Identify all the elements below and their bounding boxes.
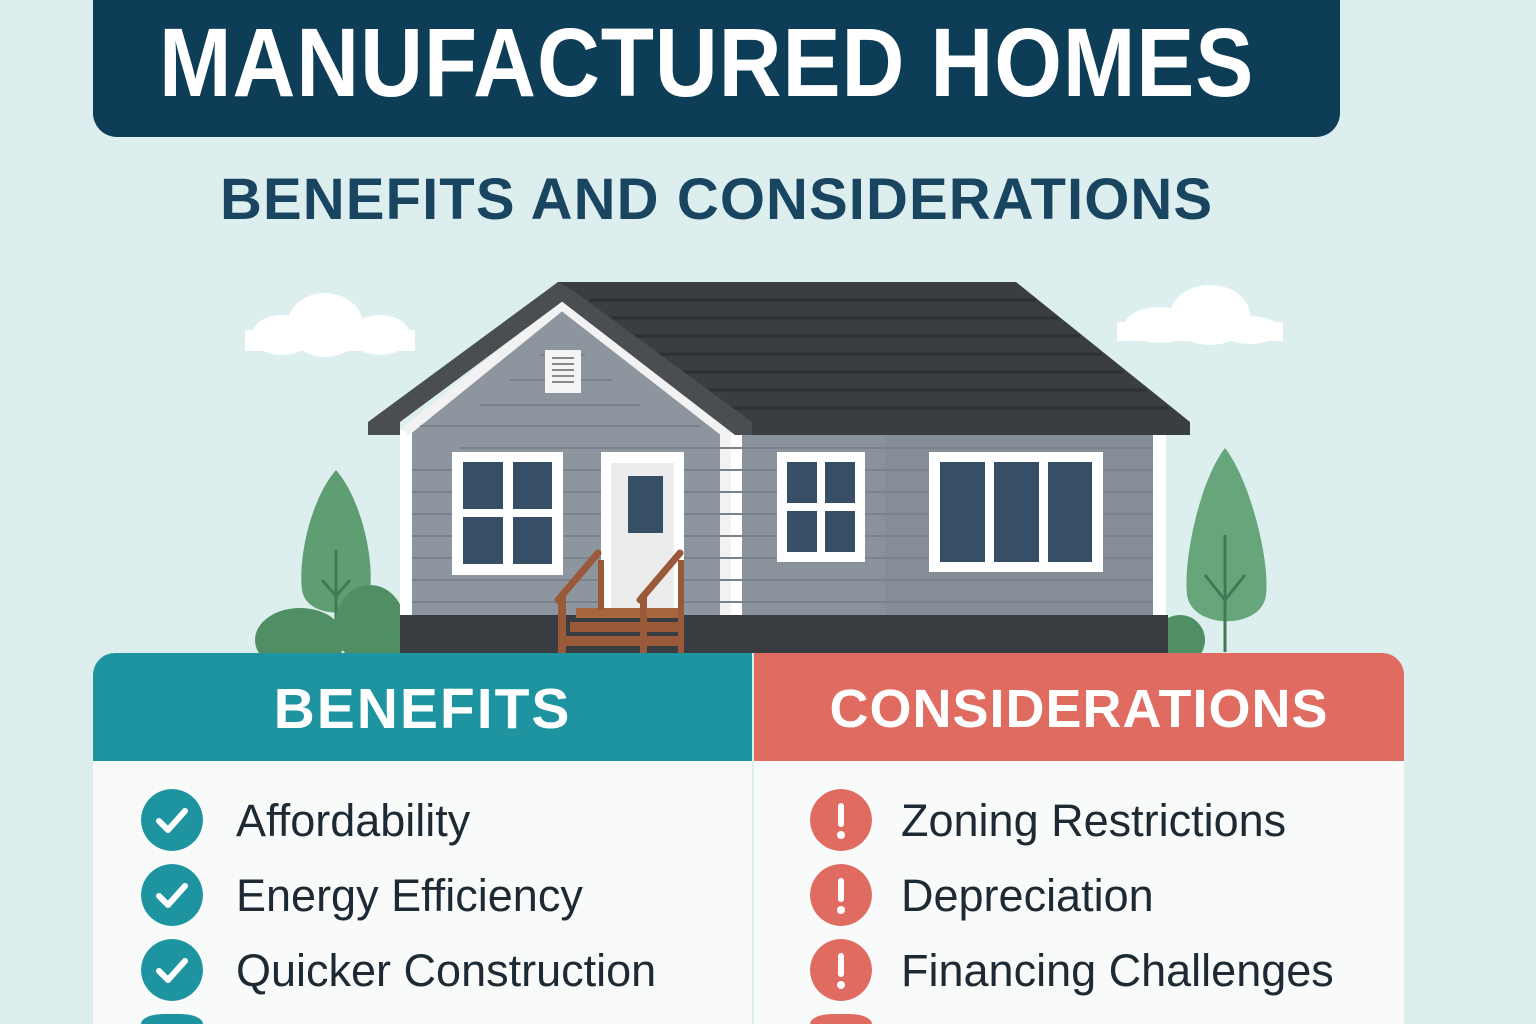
- vent: [545, 350, 581, 393]
- cloud right: [1117, 285, 1283, 345]
- roof: [558, 282, 1190, 435]
- considerations header: CONSIDERATIONS: [829, 679, 1329, 739]
- window 2: [777, 452, 865, 562]
- title banner: MANUFACTURED HOMES: [159, 8, 1254, 117]
- window 1: [452, 452, 563, 575]
- panel: considerations: [754, 653, 1404, 1024]
- bushes: [255, 585, 1205, 672]
- item: energy efficiency: [141, 864, 583, 926]
- considerations list: Financing Challenges: [901, 945, 1334, 996]
- benefits list: Affordability: [236, 795, 470, 846]
- stairs: [558, 560, 684, 653]
- considerations list: [754, 761, 1404, 1024]
- item: fourth icon (cut off): [141, 1014, 203, 1024]
- panel: benefits: [93, 653, 752, 1024]
- cloud left: [245, 293, 415, 357]
- tree right: [1186, 448, 1267, 652]
- item: zoning: [810, 789, 1286, 851]
- title banner: [93, 0, 1340, 137]
- foundation: [400, 615, 1168, 653]
- benefits list: [93, 761, 752, 1024]
- considerations list: Zoning Restrictions: [901, 795, 1286, 846]
- benefits header: [93, 653, 752, 761]
- door: [601, 452, 684, 614]
- subtitle: BENEFITS AND CONSIDERATIONS: [220, 167, 1213, 232]
- item: depreciation: [810, 864, 1154, 926]
- item: affordability: [141, 789, 470, 851]
- house body: [368, 282, 1190, 653]
- window 3: [929, 452, 1103, 572]
- item: fourth icon (cut off): [810, 1014, 872, 1024]
- considerations header: [754, 653, 1404, 761]
- benefits list: Energy Efficiency: [236, 870, 583, 921]
- benefits header: BENEFITS: [274, 677, 571, 741]
- item: financing: [810, 939, 1334, 1001]
- tree left: [301, 470, 371, 640]
- considerations list: Depreciation: [901, 870, 1154, 921]
- benefits list: Quicker Construction: [236, 945, 656, 996]
- item: quicker construction: [141, 939, 656, 1001]
